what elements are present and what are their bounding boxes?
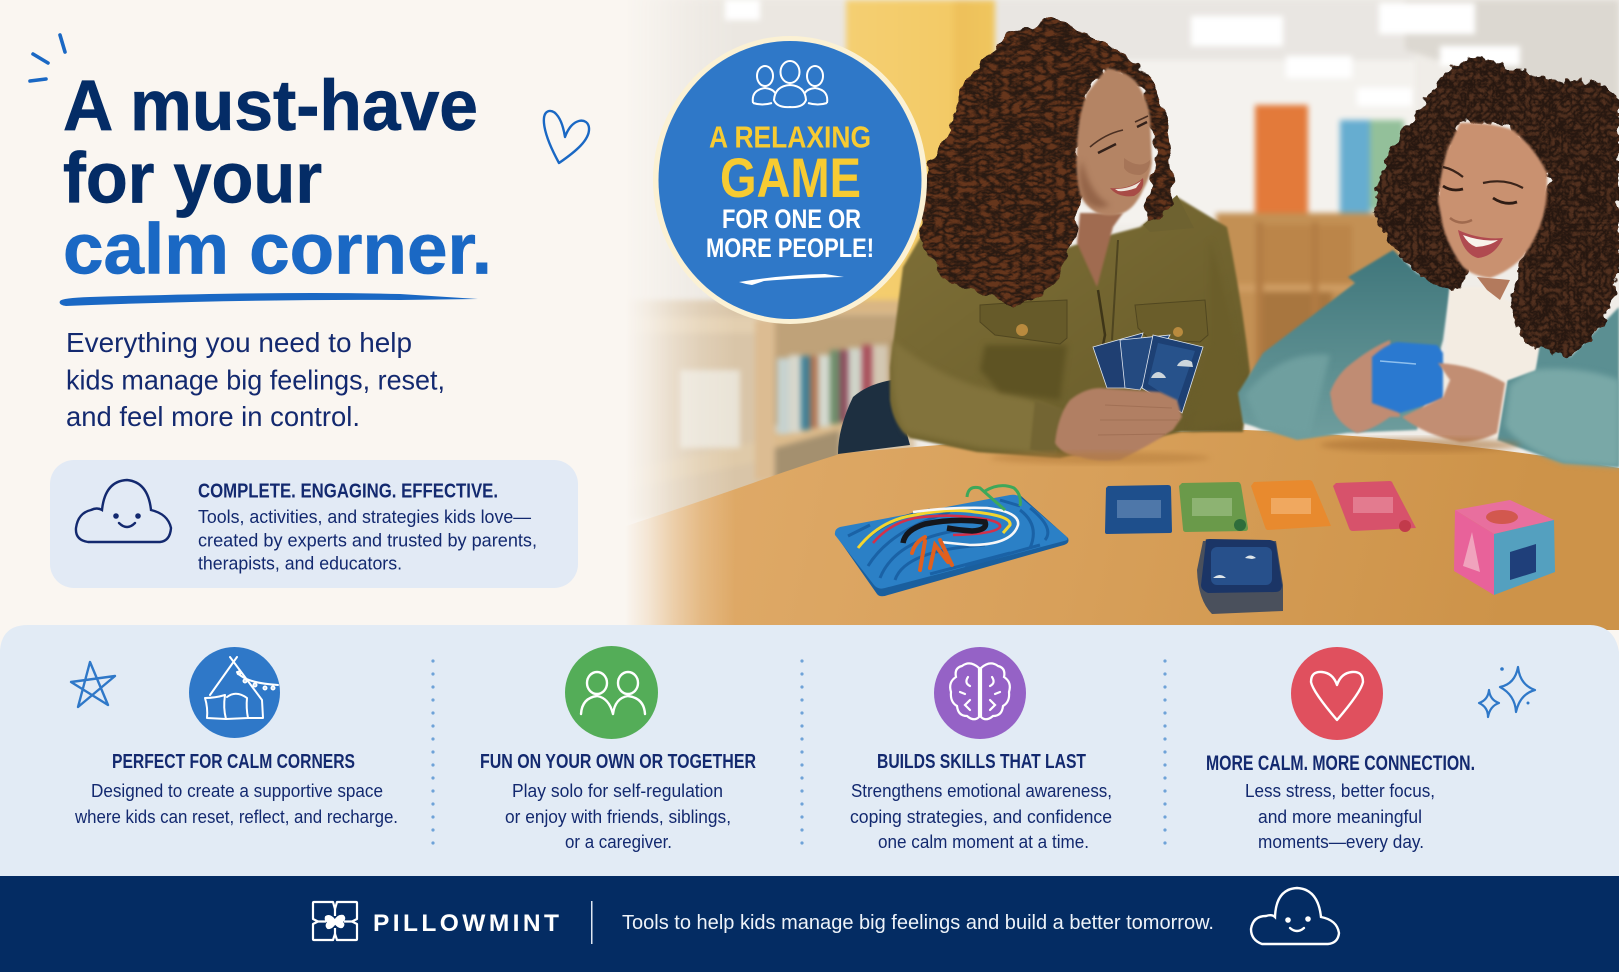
icon: two people [565, 646, 658, 739]
subheading [66, 327, 445, 432]
product: pink and teal cube [1454, 500, 1555, 595]
footer band [0, 876, 1619, 972]
callout text: therapists, and educators. [198, 554, 402, 574]
icon: sparkles [1479, 667, 1535, 717]
badge: a relaxing game: FOR ONE OR [722, 204, 861, 234]
column: builds skills that last: one calm moment at a time. [878, 832, 1089, 852]
column: fun on your own or together: FUN ON YOUR OWN OR TOGETHER [480, 750, 756, 773]
column: perfect for calm corners: where kids can reset, reflect, and recharge. [74, 807, 398, 827]
brand name: PILLOWMINT [373, 910, 559, 937]
sparkle accent [30, 35, 65, 81]
chair [838, 380, 910, 454]
callout text: created by experts and trusted by parents, [198, 530, 537, 550]
column: builds skills that last: BUILDS SKILLS THAT LAST [877, 750, 1086, 773]
column: more calm more connection: moments—every day. [1258, 832, 1424, 852]
panel: complete engaging effective [50, 460, 578, 588]
column: more calm more connection [1206, 647, 1475, 852]
icon: heart doodle [544, 111, 589, 163]
icon: smiling cloud [76, 480, 171, 542]
column: fun on your own or together [480, 646, 756, 852]
panel: benefits [0, 625, 1619, 877]
brush underline [60, 293, 478, 306]
product: blue tactile board [835, 486, 1068, 596]
badge: a relaxing game: MORE PEOPLE! [706, 233, 874, 263]
blue cube held by girl [1372, 342, 1443, 413]
column: more calm more connection: MORE CALM. MORE CONNECTION. [1206, 752, 1475, 775]
tagline: Tools to help kids manage big feelings and build a better tomorrow. [622, 911, 1214, 934]
badge: a relaxing game [653, 36, 927, 324]
column: perfect for calm corners: Designed to create a supportive space [91, 781, 383, 801]
title: for your [63, 140, 322, 218]
icon: tent [189, 647, 280, 738]
icon: three people [753, 61, 827, 107]
jacket pockets [980, 300, 1067, 344]
girl [1238, 57, 1619, 467]
table [620, 430, 1619, 630]
column: perfect for calm corners: PERFECT FOR CALM CORNERS [112, 750, 355, 773]
shelf books [777, 345, 888, 434]
title [63, 67, 492, 290]
subheading: and feel more in control. [66, 401, 360, 432]
badge: a relaxing game: A RELAXING [709, 120, 871, 154]
column: more calm more connection: and more meaningful [1258, 807, 1422, 827]
icon: star doodle [71, 662, 115, 707]
woman [890, 21, 1250, 461]
column: fun on your own or together: Play solo for self-regulation [512, 781, 723, 801]
title: calm corner. [63, 210, 492, 290]
right bookshelves [1216, 213, 1401, 383]
subheading: Everything you need to help [66, 327, 412, 358]
icon: pillowmint logo [313, 902, 357, 940]
title: A must-have [63, 67, 478, 146]
icon: cloud [1251, 888, 1339, 944]
badge: a relaxing game: GAME [720, 146, 861, 209]
column: builds skills that last: coping strategies, and confidence [850, 807, 1112, 827]
cards held by woman [1093, 333, 1203, 413]
column: fun on your own or together: or enjoy with friends, siblings, [505, 807, 731, 827]
callout text: COMPLETE. ENGAGING. EFFECTIVE. [198, 480, 498, 502]
product: activity cards on table [1105, 480, 1416, 534]
callout text: Tools, activities, and strategies kids love— [198, 507, 531, 527]
icon: brain [934, 647, 1026, 739]
photo: woman and girl playing calming game at library table [620, 0, 1619, 630]
column: builds skills that last [850, 647, 1112, 852]
column: builds skills that last: Strengthens emotional awareness, [851, 781, 1112, 801]
brush swoosh [739, 274, 844, 285]
product: card deck [1197, 539, 1283, 614]
column: perfect for calm corners [74, 647, 398, 827]
icon: heart [1291, 647, 1383, 740]
column: more calm more connection: Less stress, better focus, [1245, 781, 1435, 801]
column: fun on your own or together: or a caregiver. [565, 832, 672, 852]
subheading: kids manage big feelings, reset, [66, 364, 445, 396]
callout text [198, 480, 537, 574]
left bookshelves [625, 300, 915, 520]
